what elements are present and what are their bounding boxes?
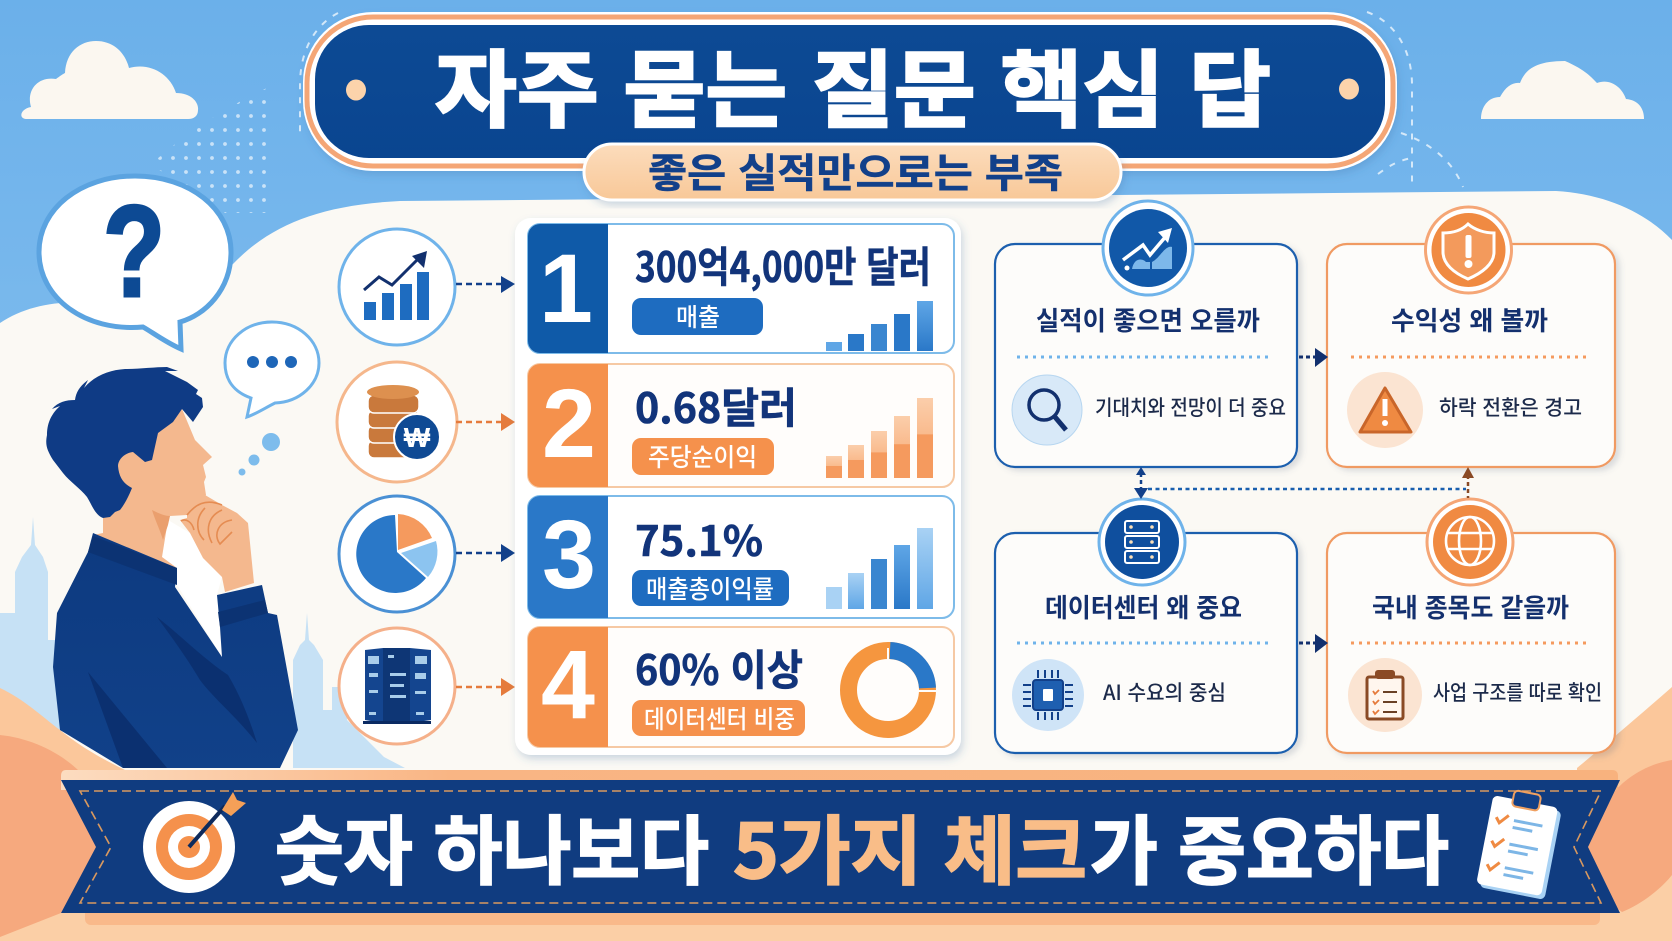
heading: 국내 종목도 같을까 (1372, 588, 1569, 625)
card 4: data center share (528, 627, 954, 747)
card 3: gross margin: 75.1% (635, 508, 763, 569)
subtitle text: 좋은 실적만으로는 부족 (648, 141, 1063, 199)
background: city skyline (0, 517, 405, 768)
ribbon text highlight: 5가지 체크 (733, 791, 1087, 900)
background: right orange hill (1577, 687, 1672, 941)
icon: growth chart circle (339, 229, 455, 345)
icon: warning triangle (1347, 372, 1423, 448)
answer: AI 수요의 중심 (1103, 677, 1226, 707)
arrow: panel C to panel D (1299, 634, 1328, 653)
figure: thinking person (46, 367, 298, 768)
heading: 데이터센터 왜 중요 (1045, 588, 1242, 625)
background: right dark hill (1588, 760, 1672, 912)
badge: shield (1426, 207, 1512, 293)
arrow: icon 4 to card 4 (456, 678, 515, 696)
arrow: panel A to panel B (1299, 348, 1328, 367)
subtitle pill (584, 141, 1121, 200)
icon: server rack circle (339, 628, 455, 744)
card 3: gross margin (528, 496, 954, 618)
ribbon text white: 숫자 하나보다 (275, 791, 709, 900)
icon: target (143, 792, 246, 893)
card 2: EPS: 주당순이익 (648, 438, 757, 474)
collar and suit body (53, 533, 298, 768)
card 1: revenue: 1 (539, 234, 593, 343)
right dot (1339, 78, 1359, 100)
card 3: gross margin: 매출총이익률 (646, 570, 774, 606)
ribbon lower shadow band (85, 905, 1600, 925)
collar shadow (88, 536, 177, 585)
face and neck (93, 409, 212, 568)
suit folds (88, 617, 257, 768)
banner fill (315, 25, 1385, 158)
panel: earnings question (995, 201, 1297, 467)
panel: domestic stocks question (1327, 499, 1615, 753)
badge: globe (1427, 499, 1513, 585)
panel: data center question (995, 499, 1297, 753)
arrow: icon 3 to card 3 (456, 544, 515, 562)
heading: 수익성 왜 볼까 (1391, 301, 1548, 338)
hair (46, 367, 203, 518)
fingers (181, 502, 232, 544)
hand (180, 495, 254, 592)
title text: 자주 묻는 질문 핵심 답 (435, 24, 1271, 145)
connector: between rows (1134, 467, 1474, 499)
card 2: EPS: 2 (542, 369, 596, 478)
jaw shadow (152, 510, 170, 540)
ear (118, 452, 146, 488)
left dot (346, 80, 366, 100)
decoration: dashed arcs (300, 12, 1463, 187)
arrow: icon 2 to card 2 (456, 413, 515, 431)
card 3: gross margin: 3 (542, 500, 596, 609)
card 4: data center share: 4 (541, 630, 595, 739)
background: cream panel (0, 191, 1672, 941)
card 1: revenue (528, 224, 954, 353)
title banner (303, 12, 1397, 171)
answer: 기대치와 전망이 더 중요 (1095, 392, 1286, 422)
icon: right cloud (1481, 61, 1644, 119)
arrow: icon 1 to card 1 (456, 276, 515, 293)
card 1: revenue: 매출 (676, 298, 720, 334)
card 2: EPS (528, 364, 954, 487)
badge: rising chart (1103, 201, 1193, 295)
icon: coins and won circle (337, 362, 457, 482)
donut chart (848, 648, 938, 730)
panel: profitability question (1327, 207, 1615, 467)
question mark: ? (103, 178, 165, 324)
badge: server (1099, 499, 1185, 585)
card 4: data center share: 60% 이상 (635, 637, 803, 698)
speech bubble: question mark (39, 176, 231, 349)
answer: 하락 전환은 경고 (1439, 392, 1582, 422)
background: left dark hill (0, 735, 100, 937)
decoration: halftone dots (150, 88, 267, 213)
answer: 사업 구조를 따로 확인 (1433, 677, 1602, 707)
icon: pie chart circle (339, 496, 455, 612)
footer ribbon (61, 770, 1620, 925)
card 1: revenue: 300억4,000만 달러 (635, 234, 931, 295)
card 4: data center share: 데이터센터 비중 (644, 700, 795, 736)
ribbon stitching (80, 791, 1601, 903)
ribbon shape (61, 780, 1620, 913)
banner frame (303, 12, 1397, 171)
icon: chip (1012, 659, 1084, 731)
icon: clipboard (1348, 658, 1422, 732)
card 2: EPS: 0.68달러 (635, 375, 797, 436)
icon: magnifier (1012, 375, 1082, 445)
cuff shadow (218, 600, 268, 627)
heading: 실적이 좋으면 오를까 (1036, 301, 1260, 338)
ribbon top strip (61, 770, 1618, 790)
panel: metric cards (515, 218, 961, 755)
background: peach footer band (0, 800, 1672, 941)
icon: checklist (1476, 786, 1564, 900)
thought dots (238, 433, 280, 476)
speech bubble: dots (225, 322, 319, 417)
ribbon text white end: 가 중요하다 (1090, 791, 1449, 900)
background: left orange hill (0, 688, 125, 941)
icon: coins and won circle: ₩ (404, 422, 431, 453)
white gap by neck and arm (162, 520, 222, 657)
icon: left cloud (21, 41, 198, 119)
